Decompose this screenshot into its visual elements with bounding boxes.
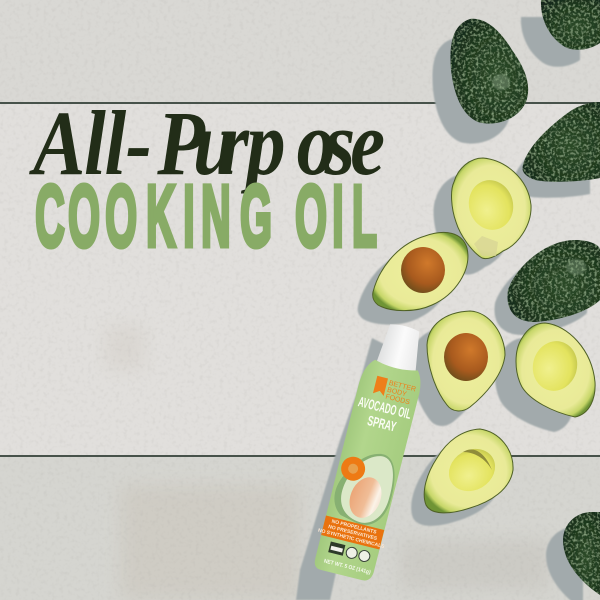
product name	[353, 393, 413, 437]
shadows cast by avocados and bottle	[296, 17, 590, 600]
brand logo	[372, 376, 417, 407]
avocado: whole, top right	[541, 0, 600, 50]
orange claims band: NO SYNTHETIC CHEMICALS	[317, 528, 386, 550]
orange claims band: NO PROPELLANTS	[331, 519, 378, 536]
brand logo: BETTER	[388, 380, 416, 393]
brand logo: FOODS	[385, 394, 411, 406]
title: Cooking Oil: COOKING OIL	[35, 168, 377, 265]
avocado: whole, middle right	[507, 240, 600, 322]
orange seal	[339, 454, 368, 483]
avocado half: hollow, right	[516, 323, 595, 417]
avocado: whole, top centre	[450, 19, 528, 124]
certification badges	[328, 541, 371, 563]
avocado half: with pit, left	[373, 232, 468, 311]
avocado: whole, right	[522, 102, 600, 182]
bottle cap	[376, 321, 426, 374]
product name: SPRAY	[366, 412, 398, 435]
avocado illustration	[329, 445, 401, 530]
product name: AVOCADO OIL	[357, 393, 413, 422]
net weight: NET WT. 5 OZ (141g)	[323, 558, 371, 576]
brand logo: BODY	[386, 387, 408, 398]
product: avocado oil spray bottle	[309, 318, 438, 584]
bottle body	[313, 357, 425, 583]
avocado half: with pit, centre	[427, 311, 505, 411]
orange claims band	[317, 515, 389, 551]
avocado: whole, bottom right	[563, 512, 600, 595]
avocado half: hollow, bottom	[424, 429, 513, 513]
orange claims band: NO PRESERVATIVES	[328, 524, 378, 542]
title: All-Purpose: All-Purpose	[29, 93, 385, 194]
avocado half: hollow, top	[452, 158, 531, 259]
